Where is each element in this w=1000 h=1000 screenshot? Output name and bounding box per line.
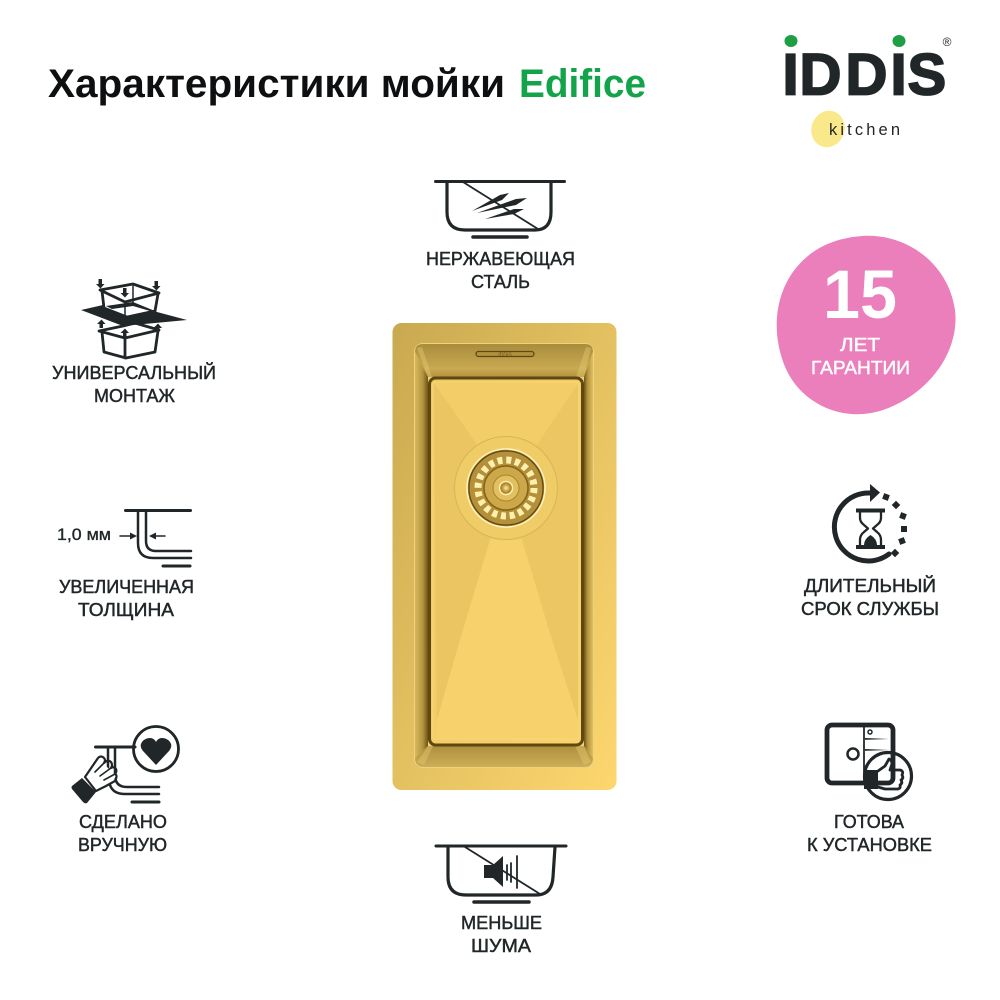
overflow slot <box>476 352 534 358</box>
logo: IDDIS kitchen <box>782 35 952 152</box>
label: less noise: ШУМА <box>471 936 531 956</box>
label: stainless steel: НЕРЖАВЕЮЩАЯ <box>426 249 575 269</box>
label: ready to install <box>807 812 932 855</box>
label: less noise: МЕНЬШЕ <box>461 913 542 933</box>
label: stainless steel: СТАЛЬ <box>471 272 530 292</box>
label: handmade <box>78 812 167 855</box>
label: less noise <box>461 913 542 956</box>
label: increased thickness <box>59 577 194 620</box>
icon: less noise bowl <box>436 846 566 902</box>
label: ready to install: К УСТАНОВКЕ <box>807 835 932 855</box>
label: long service life: СРОК СЛУЖБЫ <box>801 599 939 619</box>
icon: stainless steel bowl <box>436 182 564 237</box>
label: handmade: СДЕЛАНО <box>79 812 167 832</box>
drain <box>454 436 558 540</box>
icon: ready to install <box>827 725 912 800</box>
icon: 1.0 mm thickness <box>57 510 191 566</box>
badge: 15 years warranty: ГАРАНТИИ <box>811 358 910 378</box>
title: Характеристики мойки <box>48 62 505 106</box>
icon: hourglass with arrow <box>834 484 907 561</box>
label: stainless steel <box>426 249 575 292</box>
badge: 15 years warranty <box>777 236 956 414</box>
badge: 15 years warranty: ЛЕТ <box>840 335 880 355</box>
icon: universal mounting <box>81 279 187 358</box>
sink product image <box>392 323 616 790</box>
label: handmade: ВРУЧНУЮ <box>78 835 167 855</box>
label: universal mounting: УНИВЕРСАЛЬНЫЙ <box>52 362 216 383</box>
label: universal mounting: МОНТАЖ <box>94 386 175 406</box>
title: Edifice <box>519 62 646 106</box>
icon: 1.0 mm thickness: 1,0 мм <box>57 525 111 544</box>
badge: 15 years warranty: 15 <box>823 256 897 333</box>
label: long service life: ДЛИТЕЛЬНЫЙ <box>804 575 936 596</box>
label: universal mounting <box>52 362 216 406</box>
label: increased thickness: УВЕЛИЧЕННАЯ <box>59 577 194 597</box>
label: long service life <box>801 575 939 619</box>
logo: IDDIS kitchen: IDDIS <box>782 42 946 108</box>
logo: IDDIS kitchen: kitchen <box>829 121 900 139</box>
label: ready to install: ГОТОВА <box>834 812 904 832</box>
logo: IDDIS kitchen: ® <box>943 35 952 49</box>
label: increased thickness: ТОЛЩИНА <box>78 600 174 620</box>
icon: handmade <box>72 726 178 803</box>
overflow slot: IDDIS <box>498 352 512 358</box>
sink bowl <box>414 343 594 768</box>
